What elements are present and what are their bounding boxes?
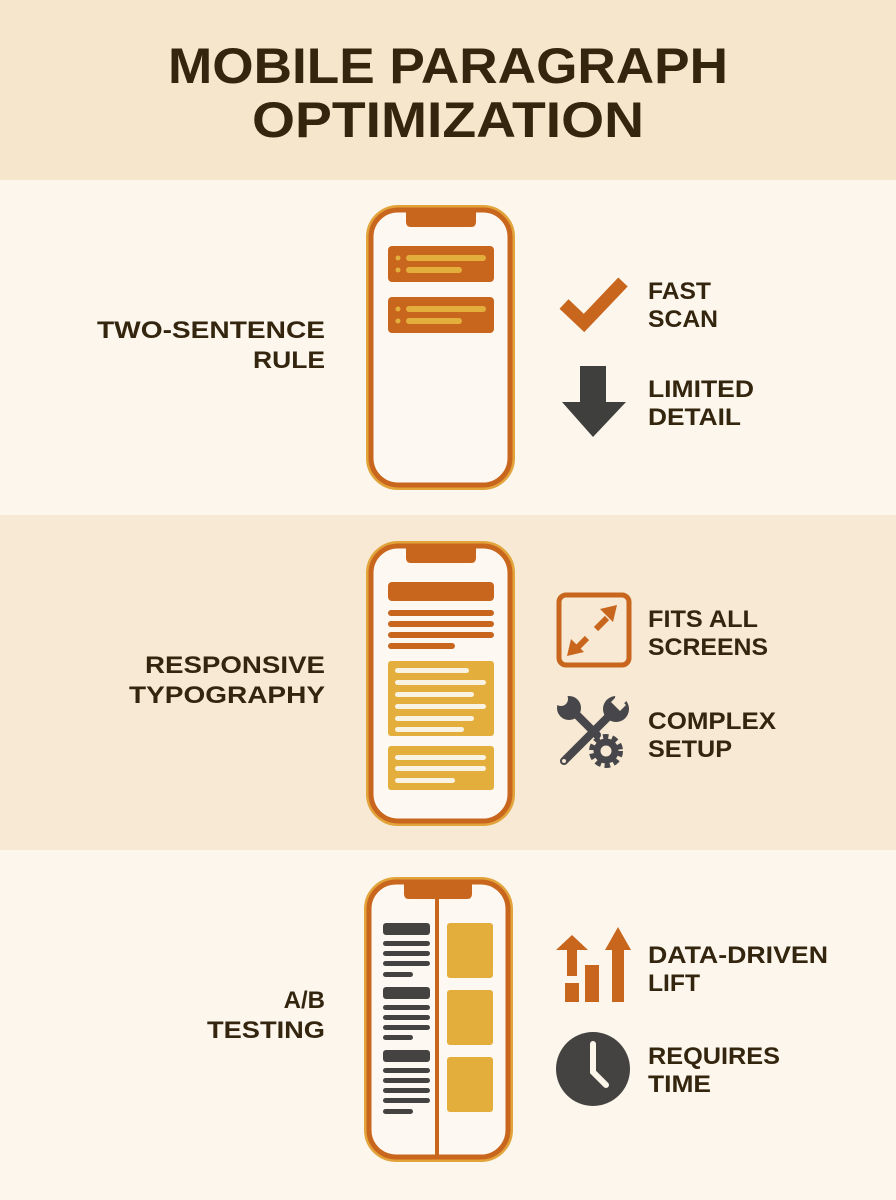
text: data-driven lift: LIFT [648,970,700,997]
text: complex setup: SETUP [648,736,732,763]
text: limited detail: DETAIL [648,404,741,431]
text: complex setup [648,708,776,763]
icon: check [564,282,623,323]
heading: a/b testing [207,987,325,1044]
text: data-driven lift [648,942,828,997]
text: fits all screens [648,606,768,661]
title: OPTIMIZATION [252,92,644,148]
text: limited detail [648,376,754,431]
heading: a/b testing: TESTING [207,1017,325,1044]
text: fits all screens: SCREENS [648,634,768,661]
text: requires time: TIME [648,1071,711,1098]
heading: a/b testing: A/B [284,987,325,1014]
phone: responsive text [370,545,511,822]
icon: resize [559,595,629,665]
heading: responsive typography [129,652,325,709]
phone: split test [368,881,509,1158]
text: limited detail: LIMITED [648,376,754,403]
text: data-driven lift: DATA-DRIVEN [648,942,828,969]
text: fast scan: SCAN [648,306,718,333]
heading: two-sentence rule: RULE [253,347,325,374]
heading: responsive typography: RESPONSIVE [145,652,325,679]
title: MOBILE PARAGRAPH [168,38,728,94]
icon: bar chart arrows [556,927,631,1002]
heading: two-sentence rule: TWO-SENTENCE [97,317,325,344]
title [168,38,728,148]
panel: responsive typography [129,545,776,822]
text: fits all screens: FITS ALL [648,606,758,633]
panel: a/b testing [207,881,828,1158]
text: requires time: REQUIRES [648,1043,780,1070]
phone: short blocks [370,209,511,486]
icon: down arrow [562,366,626,437]
text: fast scan: FAST [648,278,711,305]
text: fast scan [648,278,718,333]
icon: tools [554,692,629,764]
text: requires time [648,1043,780,1098]
icon: clock [556,1032,630,1106]
text: complex setup: COMPLEX [648,708,776,735]
panel: two-sentence rule [97,209,754,486]
heading: two-sentence rule [97,317,325,374]
heading: responsive typography: TYPOGRAPHY [129,682,325,709]
